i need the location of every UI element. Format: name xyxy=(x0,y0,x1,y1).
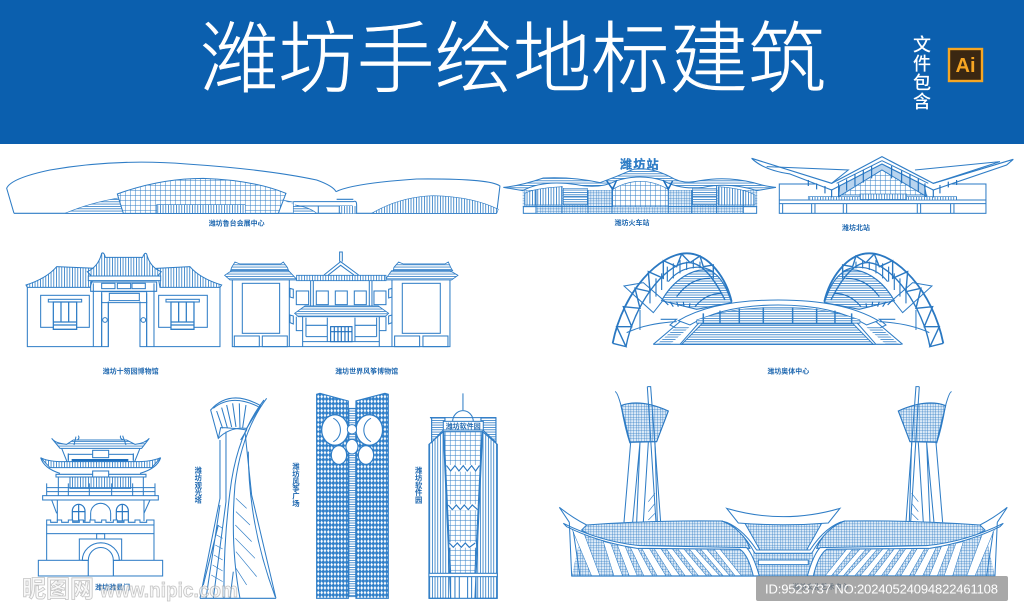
icon: Adobe Illustrator: Ai xyxy=(956,55,976,77)
watermark: nipic: www.nipic.com xyxy=(99,580,238,602)
building: software park tower xyxy=(414,393,497,598)
label: convention center: 潍坊鲁台会展中心 xyxy=(209,219,265,228)
stripes xyxy=(572,528,995,576)
building: Olympic sports center xyxy=(613,253,943,376)
watermark: nipic xyxy=(22,576,238,603)
label: kite square: 潍坊风筝广场 xyxy=(291,462,300,508)
label: Shihuyuan museum: 潍坊十笏园博物馆 xyxy=(103,367,159,376)
building: observation tower xyxy=(193,398,276,598)
building: city gate tower xyxy=(38,436,163,592)
building: cultural arts center xyxy=(559,387,1007,591)
station sign: 潍坊站 xyxy=(620,156,660,171)
building: kite square tower xyxy=(291,393,388,598)
icon: Adobe Illustrator xyxy=(949,49,982,81)
sign text: 潍坊软件园 xyxy=(446,421,481,430)
left tower xyxy=(615,387,668,522)
building: convention center xyxy=(7,162,500,228)
watermark: image ID xyxy=(756,576,1008,601)
left arch xyxy=(613,253,732,347)
building: Weifang railway station xyxy=(503,156,776,227)
header band xyxy=(0,0,1024,144)
label: world kite museum: 潍坊世界风筝博物馆 xyxy=(335,367,398,376)
title: 潍坊手绘地标建筑 xyxy=(200,15,826,103)
file contents label: 文件包含 xyxy=(911,35,931,111)
label: software park: 潍坊软件园 xyxy=(414,466,423,504)
building: Weifang north station xyxy=(752,157,1013,232)
label: observation tower: 潍坊观光塔 xyxy=(193,466,203,504)
building: world kite museum xyxy=(225,252,458,376)
watermark: nipic: 昵图网 xyxy=(22,576,94,603)
label: railway station: 潍坊火车站 xyxy=(615,218,649,227)
label: arts center: 潍坊文化艺术中心 xyxy=(793,582,849,591)
label: Olympic sports center: 潍坊奥体中心 xyxy=(767,367,809,376)
label: city gate: 潍坊潍县门 xyxy=(95,583,130,592)
label: north station: 潍坊北站 xyxy=(842,223,870,232)
watermark: image ID: ID:9523737 NO:20240524094822461108 xyxy=(765,582,998,596)
building: Shihuyuan museum xyxy=(26,253,222,376)
